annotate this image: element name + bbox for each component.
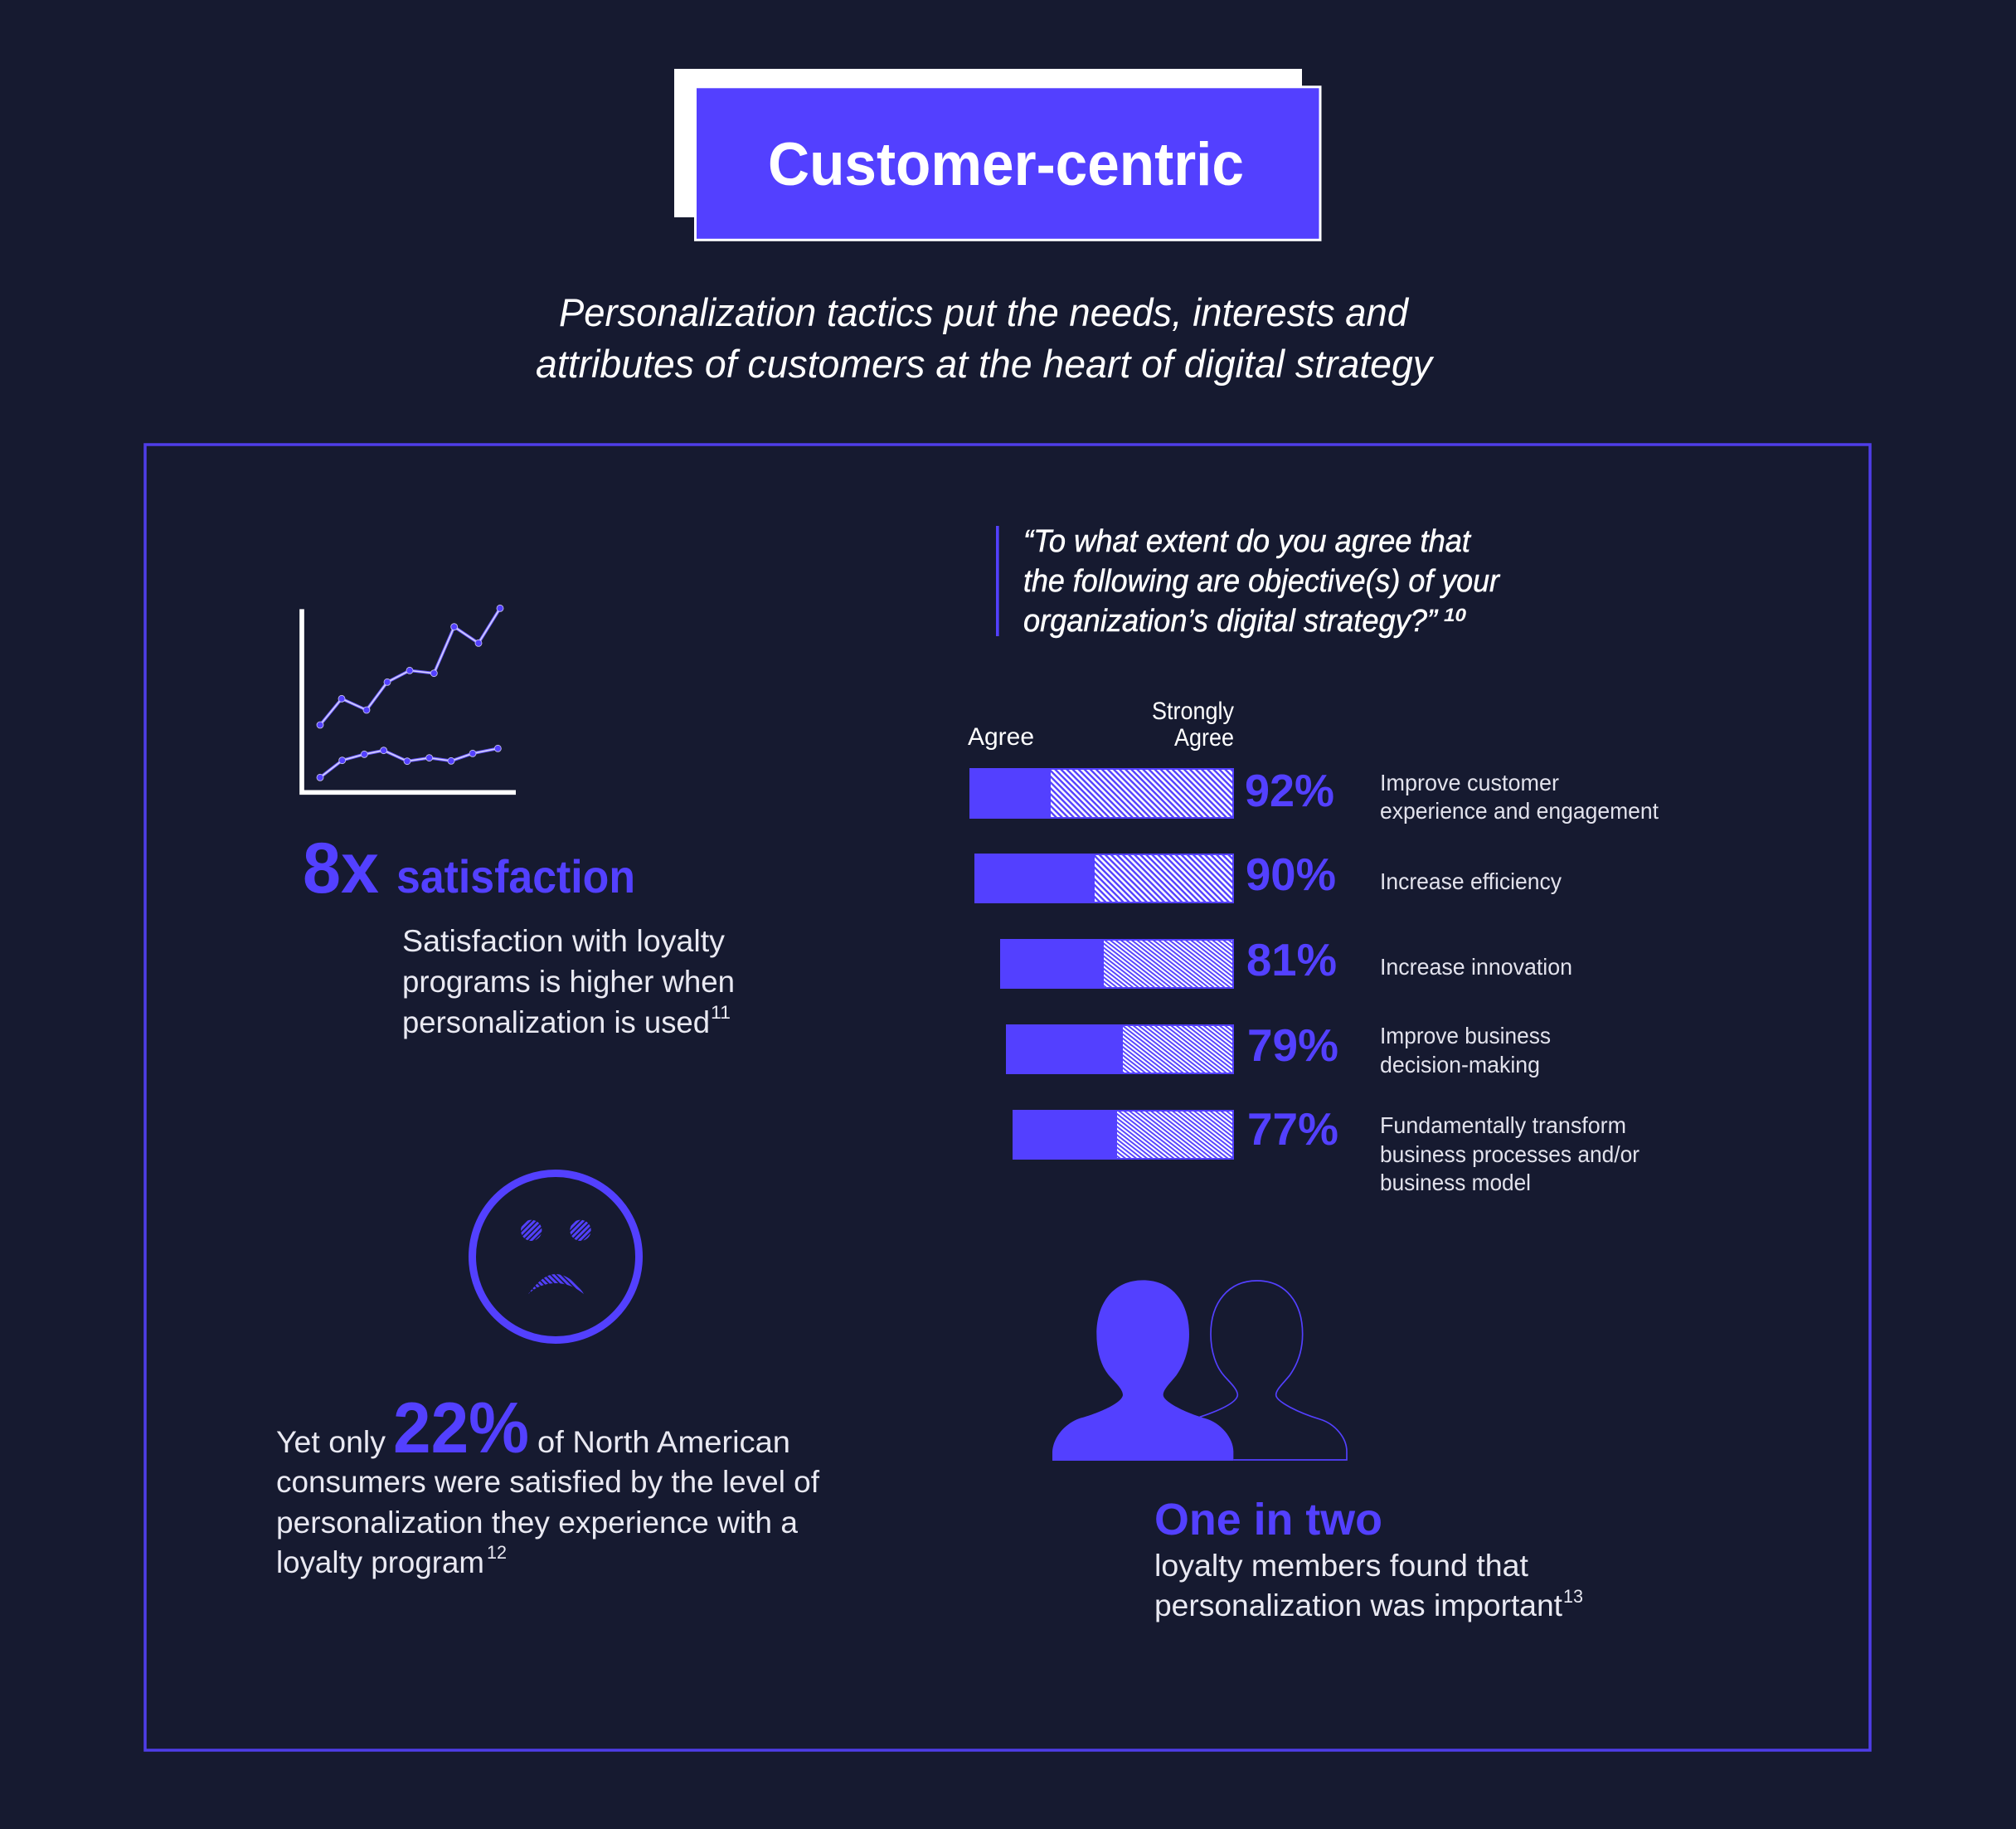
bar row: 92% — [969, 765, 1659, 824]
bar row: 77%: business processes and/or — [1380, 1141, 1640, 1167]
text: loyalty members description — [1154, 1549, 1583, 1622]
panel: 22% satisfied — [276, 1173, 820, 1579]
panel: survey question: organization’s digital strategy?” — [1023, 604, 1439, 639]
panel: survey question: the following are objective(s) of your — [1023, 564, 1500, 599]
text: satisfaction description: 11 — [711, 1002, 731, 1023]
bar row: 81%: Increase innovation — [1380, 954, 1572, 980]
bar row: 77% — [1013, 1103, 1640, 1195]
icon: sad face — [473, 1173, 639, 1340]
text: 22% statement: 22% — [393, 1389, 529, 1468]
text: 22% statement: Yet only — [276, 1425, 386, 1459]
panel: survey question — [996, 524, 1500, 639]
bar row: 92%: Improve customer — [1380, 770, 1559, 795]
panel: one in two — [1052, 1280, 1583, 1622]
text: 22% statement: consumers were satisfied by the level of — [276, 1465, 820, 1499]
text: satisfaction description: personalization is used — [402, 1005, 710, 1039]
panel: content frame — [145, 445, 1870, 1750]
bar chart: digital strategy objectives — [968, 698, 1659, 1195]
text: loyalty members description: personalization was important — [1154, 1588, 1563, 1622]
panel: survey question: 10 — [1444, 605, 1467, 625]
stat: 8x satisfaction: satisfaction — [396, 850, 635, 902]
title banner — [674, 69, 1320, 240]
text: 22% statement — [276, 1389, 820, 1579]
title banner: Customer-centric — [768, 131, 1244, 198]
legend labels: Agree — [968, 723, 1034, 751]
legend labels: Agree — [1174, 724, 1234, 752]
bar row: 77%: 77% — [1247, 1103, 1338, 1155]
text: 22% statement: 12 — [487, 1542, 507, 1563]
bar row: 92%: experience and engagement — [1380, 798, 1659, 824]
icon: line chart — [302, 605, 516, 792]
text: loyalty members description: loyalty members found that — [1154, 1549, 1529, 1583]
text: loyalty members description: 13 — [1563, 1586, 1583, 1607]
panel: survey question: “To what extent do you agree that — [1023, 524, 1471, 559]
stat: 8x satisfaction: 8x — [303, 829, 379, 908]
text: satisfaction description: Satisfaction with loyalty — [402, 924, 725, 958]
bar row: 79%: Improve business — [1380, 1023, 1551, 1048]
bar row: 79%: 79% — [1247, 1019, 1338, 1071]
bar row: 77%: Fundamentally transform — [1380, 1112, 1626, 1138]
text: satisfaction description: programs is higher when — [402, 965, 735, 999]
bar row: 90%: Increase efficiency — [1380, 868, 1562, 894]
subtitle — [536, 290, 1434, 386]
text: satisfaction description — [402, 924, 735, 1039]
panel: 8x satisfaction — [302, 605, 735, 1039]
bar row: 81% — [1000, 934, 1572, 989]
text: 22% statement: of North American — [537, 1425, 790, 1459]
bar row: 79%: decision-making — [1380, 1052, 1540, 1077]
bar row: 92%: 92% — [1245, 765, 1334, 816]
bar row: 90%: 90% — [1246, 849, 1336, 900]
text: 22% statement: personalization they experience with a — [276, 1506, 798, 1540]
icon: two people — [1052, 1280, 1347, 1461]
bar row: 90% — [974, 849, 1562, 903]
stat: 8x satisfaction — [303, 829, 635, 908]
stat: one in two: One in two — [1154, 1495, 1382, 1544]
text: 22% statement: loyalty program — [276, 1545, 484, 1579]
subtitle: Personalization tactics put the needs, interests and — [559, 290, 1410, 334]
bar row: 77%: business model — [1380, 1170, 1531, 1195]
bar row: 79% — [1006, 1019, 1551, 1077]
legend labels — [968, 698, 1234, 752]
legend labels: Strongly — [1152, 698, 1234, 725]
bar row: 81%: 81% — [1246, 934, 1337, 985]
subtitle: attributes of customers at the heart of digital strategy — [536, 342, 1434, 386]
